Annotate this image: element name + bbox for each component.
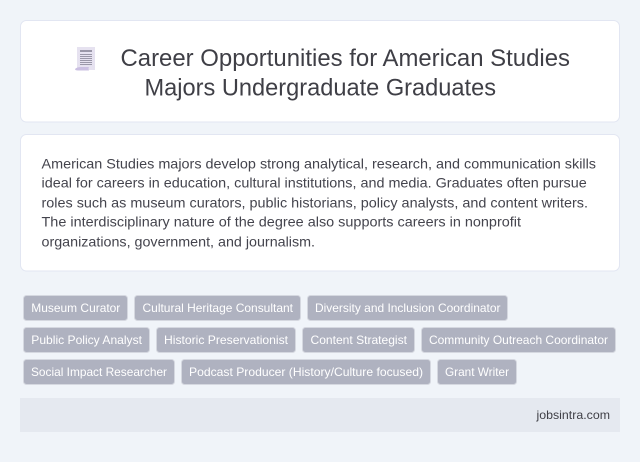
tag: Public Policy Analyst: Public Policy Analyst bbox=[31, 333, 143, 347]
tag: Content Strategist: Content Strategist bbox=[310, 333, 408, 347]
tag: Content Strategist bbox=[302, 328, 414, 352]
title: Career Opportunities for American Studies bbox=[120, 45, 570, 72]
footer source: jobsintra.com bbox=[535, 408, 610, 422]
text block: description: The interdisciplinary nature of the degree also supports careers in nonprofit bbox=[42, 214, 521, 230]
text block: description: organizations, government, and journalism. bbox=[42, 233, 315, 249]
tag: Social Impact Researcher bbox=[24, 360, 174, 384]
tag: Social Impact Researcher: Social Impact Researcher bbox=[31, 365, 167, 379]
text block: description: American Studies majors develop strong analytical, research, and communication skills bbox=[42, 155, 596, 171]
tag: Public Policy Analyst bbox=[24, 328, 150, 352]
text block: description: roles such as museum curators, public historians, policy analysts, and content writers. bbox=[42, 194, 588, 210]
panel: description bbox=[20, 134, 620, 271]
tag: Cultural Heritage Consultant bbox=[134, 296, 300, 320]
tag: Podcast Producer bbox=[182, 360, 430, 384]
tag: Cultural Heritage Consultant: Cultural Heritage Consultant bbox=[142, 301, 294, 315]
icon: scroll document bbox=[75, 47, 95, 70]
panel: title card bbox=[20, 20, 620, 122]
tag: Grant Writer bbox=[438, 360, 516, 384]
tags: career roles bbox=[24, 296, 616, 384]
tag: Museum Curator bbox=[24, 296, 128, 320]
tag: Historic Preservationist bbox=[156, 328, 296, 352]
tag: Community Outreach Coordinator: Community Outreach Coordinator bbox=[429, 333, 608, 347]
tag: Diversity and Inclusion Coordinator bbox=[308, 296, 508, 320]
title bbox=[120, 45, 570, 102]
text block: description bbox=[42, 155, 596, 249]
text block: description: ideal for careers in education, cultural institutions, and media. Graduates often pursue bbox=[42, 174, 587, 190]
tag: Diversity and Inclusion Coordinator: Diversity and Inclusion Coordinator bbox=[315, 301, 500, 315]
title: Majors Undergraduate Graduates bbox=[144, 75, 496, 102]
tag: Podcast Producer: Podcast Producer (History/Culture focused) bbox=[189, 365, 423, 379]
tag: Museum Curator: Museum Curator bbox=[31, 301, 120, 315]
tag: Community Outreach Coordinator bbox=[422, 328, 616, 352]
tag: Grant Writer: Grant Writer bbox=[445, 365, 509, 379]
tag: Historic Preservationist: Historic Preservationist bbox=[164, 333, 289, 347]
footer bar bbox=[20, 398, 620, 432]
